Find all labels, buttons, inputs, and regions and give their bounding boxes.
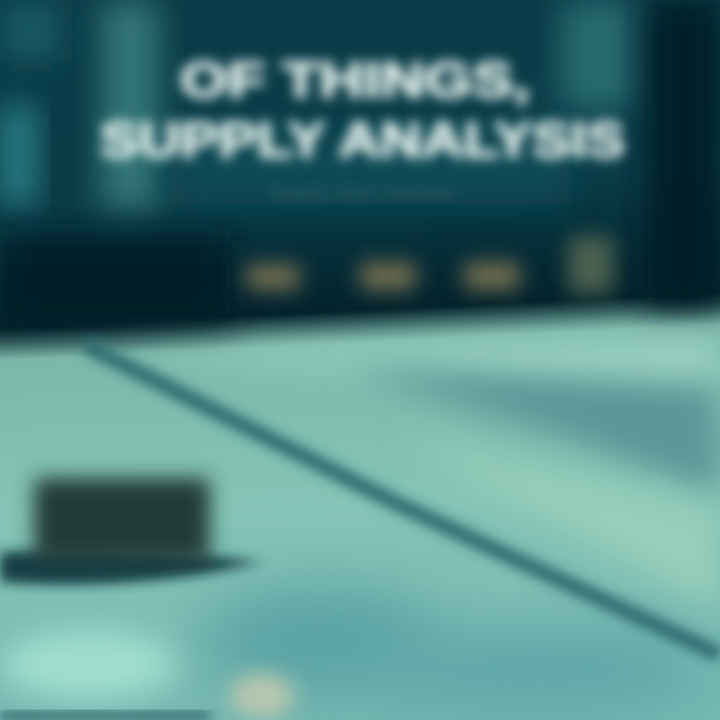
panel: dark upper wall [0, 0, 720, 325]
icon: hat on floor [0, 478, 262, 584]
bottom object [0, 674, 294, 720]
diagonal floor line [85, 345, 720, 655]
title [100, 52, 625, 168]
title: SUPPLY ANALYSIS [100, 112, 625, 168]
panel: pale floor [0, 335, 720, 710]
title: OF THINGS, [180, 52, 530, 108]
stat markers [246, 236, 614, 294]
subtitle: Supply chain overview [270, 183, 456, 202]
